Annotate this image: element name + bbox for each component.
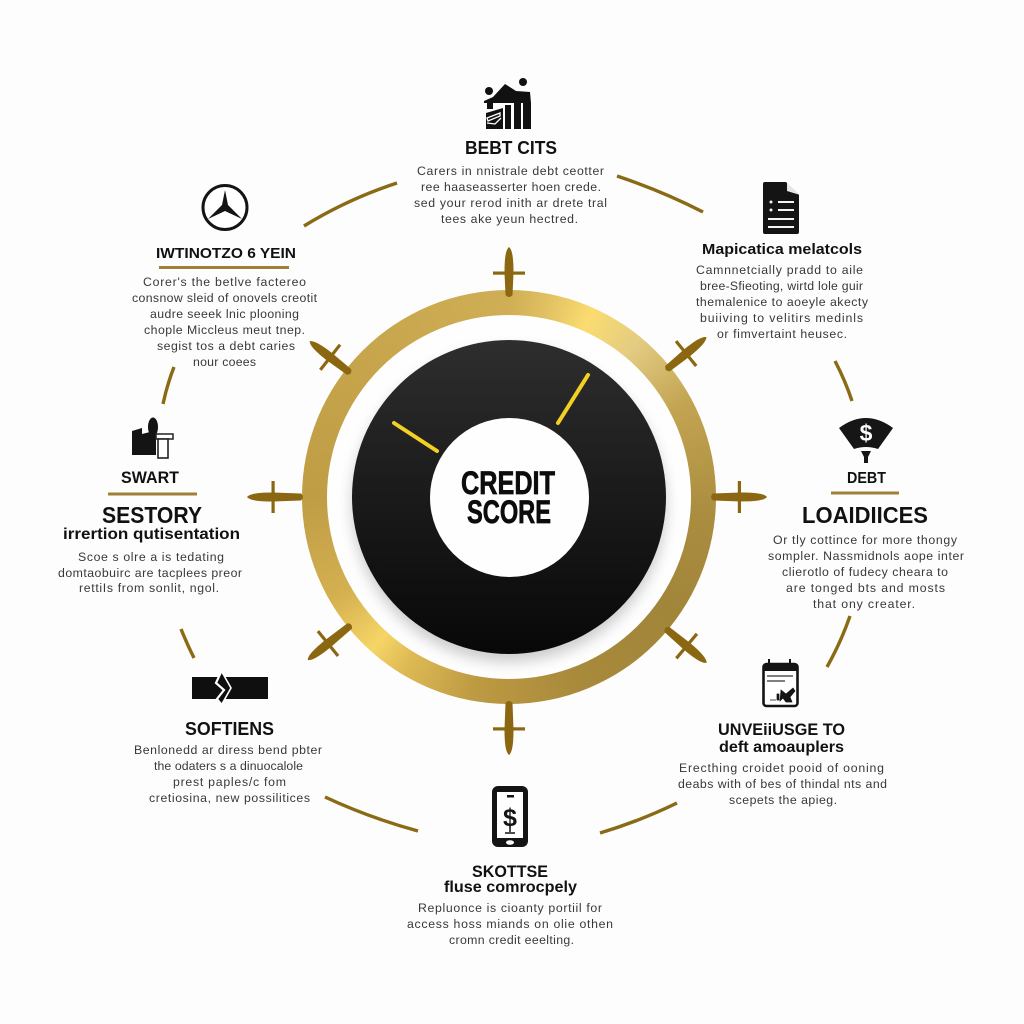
panel: swart sestory (left) bbox=[58, 418, 242, 595]
outer connecting arcs bbox=[163, 176, 852, 833]
heading: SESTORY bbox=[102, 502, 202, 528]
body text: Corer's the betlve factereo bbox=[143, 275, 306, 289]
heading bbox=[444, 862, 577, 896]
icon: broken bar bbox=[192, 672, 268, 704]
icon: calendar bbox=[764, 659, 798, 706]
heading: IWTINOTZO 6 YEIN bbox=[156, 245, 296, 262]
body text bbox=[58, 550, 242, 595]
subheading line: irrertion qutisentation bbox=[63, 526, 240, 543]
body text: cretiosina, new possilitices bbox=[149, 791, 310, 805]
body text: domtaobuirc are tacplees preor bbox=[58, 566, 242, 580]
panel: debt cuts (top) bbox=[414, 78, 607, 226]
body text: the odaters s a dinuocalole bbox=[154, 759, 303, 773]
icon: phone with dollar bbox=[492, 786, 528, 847]
gold outer ring bbox=[302, 290, 716, 704]
heading: fluse comrocpely bbox=[444, 879, 577, 896]
body text bbox=[696, 263, 869, 341]
body text bbox=[414, 164, 607, 226]
icon: dollar fan: $ bbox=[860, 420, 873, 446]
icon: dollar fan bbox=[839, 418, 893, 463]
body text: sed your rerod inith ar drete tral bbox=[414, 196, 607, 210]
body text: Benlonedd ar diress bend pbter bbox=[134, 743, 322, 757]
body text: access hoss miands on olie othen bbox=[407, 917, 613, 931]
body text: chople Miccleus meut tnep. bbox=[144, 323, 305, 337]
title: credit score: CREDIT bbox=[461, 465, 555, 501]
body text: tees ake yeun hectred. bbox=[441, 212, 578, 226]
body text: ree haaseasserter hoen crede. bbox=[421, 180, 601, 194]
gauge needles bbox=[394, 375, 588, 451]
body text: prest paples/c fom bbox=[173, 775, 286, 789]
body text bbox=[134, 743, 322, 805]
body text bbox=[407, 901, 613, 947]
white gap inside ring bbox=[327, 315, 691, 679]
panel: softens (lower left) bbox=[134, 672, 322, 805]
heading: LOAIDIICES bbox=[802, 502, 928, 528]
body text: bree-Sfieoting, wirtd lole guir bbox=[700, 279, 863, 293]
heading: SKOTTSE bbox=[472, 862, 548, 881]
black central disc bbox=[352, 340, 666, 654]
heading: UNVEiiUSGE TO bbox=[718, 720, 845, 739]
body text: cromn credit eeelting. bbox=[449, 933, 574, 947]
icon: three-point star bbox=[203, 186, 247, 230]
heading bbox=[718, 720, 845, 756]
body text: are tonged bts and mosts bbox=[786, 581, 945, 595]
title: credit score: SCORE bbox=[467, 494, 551, 530]
body text: consnow sleid of onovels creotit bbox=[132, 291, 318, 305]
heading: BEBT CITS bbox=[465, 138, 557, 158]
icon: house and bars bbox=[484, 78, 531, 129]
body text bbox=[768, 533, 964, 611]
divider bbox=[159, 266, 289, 269]
body text: segist tos a debt caries bbox=[157, 339, 295, 353]
panel: top right bbox=[696, 182, 869, 341]
panel: top left bbox=[132, 186, 318, 369]
heading: SOFTIENS bbox=[185, 719, 274, 739]
body text bbox=[132, 275, 318, 369]
panel: debt loaidiices (right) bbox=[768, 418, 964, 611]
panel: bottom bbox=[407, 786, 613, 947]
divider bbox=[108, 492, 197, 496]
body text: buiiving to velitirs medinls bbox=[700, 311, 863, 325]
body text: themalenice to aoeyle akecty bbox=[696, 295, 869, 309]
ring tick markers bbox=[247, 247, 767, 755]
icon: building and pillar bbox=[132, 418, 173, 458]
body text: clierotlo of fudecy cheara to bbox=[782, 565, 948, 579]
body text bbox=[678, 761, 887, 807]
icon: phone with dollar: $ bbox=[503, 804, 517, 832]
body text: sompler. Nassmidnols aope inter bbox=[768, 549, 964, 563]
body text: nour coees bbox=[193, 355, 256, 369]
body text: scepets the apieg. bbox=[729, 793, 837, 807]
body text: deabs with of bes of thindal nts and bbox=[678, 777, 887, 791]
body text: rettiIs from sonlit, ngol. bbox=[79, 581, 219, 595]
body text: Erecthing croidet pooid of ooning bbox=[679, 761, 884, 775]
body text: Camnnetcially pradd to aile bbox=[696, 263, 863, 277]
body text: audre seeek lnic plooning bbox=[150, 307, 299, 321]
body text: Or tly cottince for more thongy bbox=[773, 533, 958, 547]
divider bbox=[831, 492, 899, 494]
heading: deft amoauplers bbox=[719, 739, 844, 756]
icon: document bbox=[763, 182, 799, 234]
body text: Scoe s olre a is tedating bbox=[78, 550, 224, 564]
body text: or fimvertaint heusec. bbox=[717, 327, 847, 341]
title: credit score bbox=[461, 465, 555, 530]
body text: that ony creater. bbox=[813, 597, 915, 611]
body text: Repluonce is cioanty portiil for bbox=[418, 901, 602, 915]
subheading: SWART bbox=[121, 469, 179, 487]
body text: Carers in nnistrale debt ceotter bbox=[417, 164, 604, 178]
white hub circle bbox=[430, 418, 589, 577]
panel: lower right bbox=[678, 659, 887, 807]
heading: Mapicatica melatcols bbox=[702, 241, 862, 258]
subheading: DEBT bbox=[847, 470, 886, 487]
